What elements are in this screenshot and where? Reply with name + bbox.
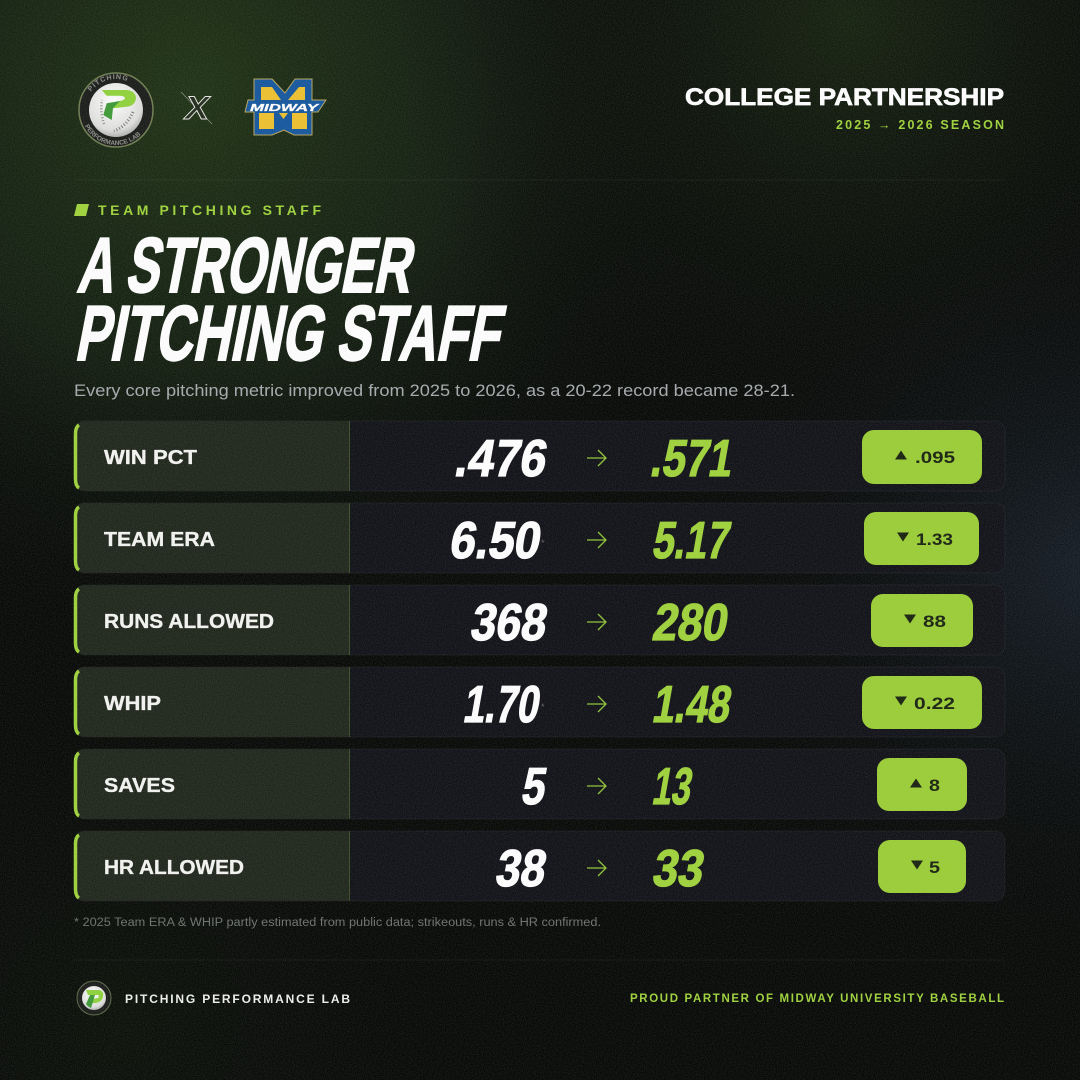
logo: Midway [245,79,326,135]
row: Win Pct: .476 [451,430,552,488]
row: WHIP: 1.48 [649,676,736,734]
row: HR Allowed: 5 [929,858,940,877]
main title [71,222,512,377]
footer partner line: PROUD PARTNER OF MIDWAY UNIVERSITY BASEBALL [630,993,1004,1005]
row: Saves: SAVES [104,775,175,797]
row: Saves: 8 [929,776,940,795]
row: Team ERA: TEAM ERA [104,529,215,551]
logo: Pitching Performance Lab: PERFORMANCE LAB [85,124,140,146]
header season: 2025 → 2026 SEASON [836,118,1004,132]
main title: A STRONGER [73,222,423,309]
logo: Pitching Performance Lab [78,72,154,148]
row: Saves: 5 [518,758,551,816]
row: HR Allowed: HR ALLOWED [104,857,244,879]
row: Team ERA [75,503,1005,573]
row: Win Pct: .571 [647,430,738,488]
row: Team ERA: 6.50 [446,512,546,570]
main title: PITCHING STAFF [71,290,512,377]
row: Saves [75,749,1005,819]
header title: College Partnership: COLLEGE PARTNERSHIP [685,84,1004,111]
row: WHIP: 0.22 [914,694,955,713]
row: WHIP [75,667,1005,737]
row: Runs Allowed: 280 [649,594,733,652]
row: Runs Allowed: 88 [923,612,946,631]
footer brand name: PITCHING PERFORMANCE LAB [125,992,350,1006]
row: Team ERA: 5.17 [649,512,735,570]
footer logo [77,981,111,1015]
row: Win Pct [75,421,1005,491]
header title: College Partnership [685,84,1004,132]
row: WHIP: WHIP [104,693,161,715]
logo: Pitching Performance Lab: PITCHING [88,74,128,92]
row: HR Allowed: 33 [649,840,709,898]
row: Win Pct: WIN PCT [104,447,197,469]
row: Team ERA: * [541,538,545,548]
subtitle: Every core pitching metric improved from 2025 to 2026, as a 20-22 record became 28-21. [74,381,795,400]
eyebrow: TEAM PITCHING STAFF [98,202,321,218]
row: Saves: 13 [649,758,697,816]
row: Win Pct: .095 [915,448,955,467]
logo separator: X [181,90,212,126]
row: Runs Allowed: 368 [467,594,552,652]
logo: Midway: MIDWAY [250,102,320,114]
row: HR Allowed: 38 [492,840,551,898]
row: Team ERA: 1.33 [916,530,953,549]
footnote: * 2025 Team ERA & WHIP partly estimated from public data; strikeouts, runs & HR confirmed. [74,917,601,929]
stats table [75,421,1005,901]
row: WHIP: * [541,702,545,712]
row: WHIP: 1.70 [460,676,545,734]
row: HR Allowed [75,831,1005,901]
row: Runs Allowed [75,585,1005,655]
logo separator: X: X [183,90,211,126]
row: Runs Allowed: RUNS ALLOWED [104,611,274,633]
